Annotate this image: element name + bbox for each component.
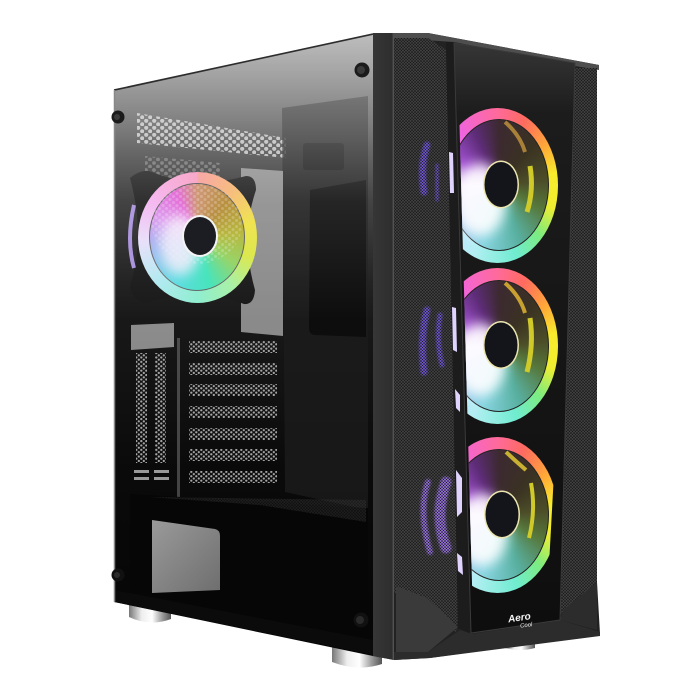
logo (506, 611, 534, 631)
foot: left chrome (129, 600, 171, 623)
glass edge (114, 34, 373, 602)
PSU shroud (177, 496, 368, 510)
case corner pillar (373, 33, 394, 660)
tray cutout large (309, 180, 366, 337)
logo: Aero (506, 611, 532, 625)
PCI bracket edge (177, 338, 180, 498)
foot: right chrome (332, 640, 382, 668)
bottom rail (114, 602, 181, 616)
PSU window (152, 520, 220, 593)
right front mesh (560, 68, 597, 615)
left front mesh (394, 38, 458, 632)
logo: Cool (520, 622, 534, 630)
front glass panel (454, 43, 575, 633)
tray cutout small (303, 143, 344, 170)
lower left trim (396, 586, 458, 652)
light slits in strip (449, 152, 463, 575)
purple glow arcs fan 2 (423, 310, 442, 372)
top cap edge (393, 33, 599, 70)
CPU cutout plate (241, 168, 283, 336)
purple glow arcs fan 1 (423, 145, 437, 200)
front fan 2 (464, 268, 558, 424)
rear hex vent top (137, 113, 286, 158)
mesh dots over glow (394, 38, 458, 632)
case silhouette (373, 33, 600, 660)
rear expansion plate (131, 323, 174, 350)
horizontal PCI slots (189, 341, 277, 483)
vertical PCI slots (134, 353, 169, 480)
front fans (460, 108, 558, 593)
rear RGB fan (138, 172, 257, 303)
left edge pale fan glow (130, 205, 134, 268)
glass sheen (115, 35, 373, 278)
glass screws (112, 62, 370, 628)
rear hex vent second (145, 156, 220, 178)
lower right trim (560, 582, 597, 630)
front fan 1 (460, 108, 558, 263)
foot: front chrome (505, 638, 535, 650)
motherboard tray right (282, 96, 368, 510)
side glass panel with interior (114, 34, 373, 656)
purple glow arcs fan 3 (423, 482, 446, 552)
front fan 3 (468, 437, 554, 593)
lower base (394, 620, 600, 660)
centre pillar strip (446, 42, 472, 634)
rear fan frame (130, 171, 256, 304)
PSU shroud mesh (150, 497, 366, 522)
